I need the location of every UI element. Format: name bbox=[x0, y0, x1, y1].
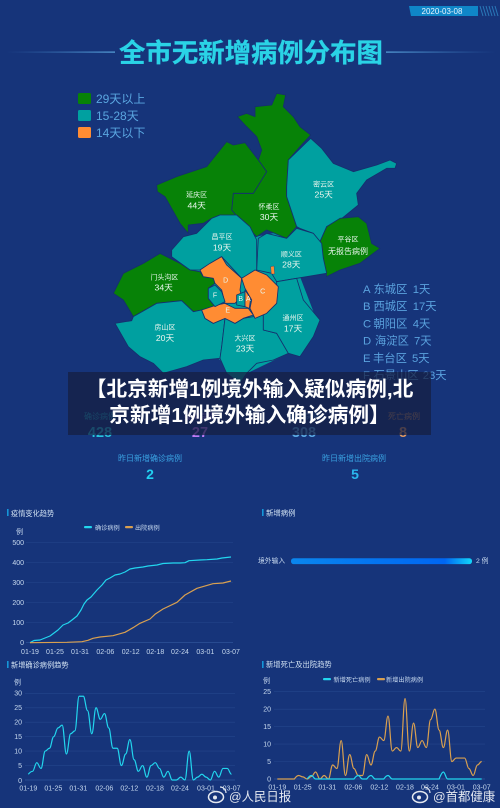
district: Changping bbox=[172, 215, 257, 278]
watermark: People's Daily bbox=[208, 787, 291, 804]
x axis labels: 02-24 bbox=[171, 649, 189, 656]
line: confirmed bbox=[30, 557, 231, 643]
x axis labels: 01-31 bbox=[71, 649, 89, 656]
district: Chaoyang bbox=[242, 270, 278, 318]
heading: new confirmed trend: 新增确诊病例趋势 bbox=[11, 660, 69, 670]
x axis labels: 03-01 bbox=[447, 784, 465, 792]
line: new deaths bbox=[307, 772, 482, 779]
x axis labels: 02-24 bbox=[171, 786, 189, 792]
chart legend: 新增死亡病例 bbox=[334, 676, 371, 684]
y axis labels: 0 bbox=[20, 640, 24, 647]
district letter key: 东城区 bbox=[374, 283, 407, 296]
district letter key: 23天 bbox=[423, 370, 447, 382]
chart legend: 出院病例 bbox=[135, 524, 160, 532]
statistics row: 确诊病例 bbox=[84, 411, 116, 421]
map legend: 14天以下 bbox=[96, 126, 145, 140]
y axis labels: 25 bbox=[14, 705, 22, 712]
y axis labels: 10 bbox=[263, 742, 271, 748]
y axis labels: 5 bbox=[18, 763, 22, 770]
district: Yanqing bbox=[157, 142, 267, 233]
chart legend bbox=[84, 524, 160, 532]
statistics row bbox=[84, 411, 420, 482]
district labels: C bbox=[260, 288, 265, 295]
district letter key: 朝阳区 bbox=[374, 318, 407, 331]
district labels: 顺义区 bbox=[281, 250, 302, 258]
date tag bbox=[409, 6, 498, 16]
district labels: 28天 bbox=[282, 260, 301, 270]
heading: new deaths and discharges: 新增死亡及出院趋势 bbox=[266, 660, 332, 669]
map legend: 15-28天 bbox=[96, 109, 139, 123]
x axis labels: 02-18 bbox=[146, 649, 164, 656]
district: airport exclave bbox=[271, 266, 275, 274]
district letter key: F bbox=[363, 370, 370, 382]
x axis labels: 01-19 bbox=[21, 649, 39, 656]
district: Shunyi bbox=[257, 228, 327, 282]
district: Tongzhou bbox=[263, 278, 320, 357]
district: Xicheng bbox=[237, 292, 245, 307]
district: Fangshan bbox=[115, 301, 225, 373]
y axis labels: 30 bbox=[14, 690, 22, 698]
district letter key: 5天 bbox=[412, 353, 430, 365]
panel: new confirmed trend chart bbox=[7, 660, 241, 792]
line: new confirmed bbox=[28, 696, 231, 780]
x axis labels: 02-06 bbox=[344, 784, 362, 792]
y axis labels: 25 bbox=[263, 689, 271, 696]
y axis labels: 0 bbox=[267, 776, 271, 784]
district labels: 通州区 bbox=[283, 313, 303, 322]
district labels: 大兴区 bbox=[235, 333, 255, 342]
y axis labels: 0 bbox=[18, 778, 22, 785]
district letter key: D bbox=[363, 336, 371, 348]
district letter key bbox=[363, 283, 447, 382]
headline overlay banner: 【北京新增1例境外输入疑似病例,北 bbox=[86, 378, 413, 400]
x axis labels: 03-07 bbox=[223, 786, 241, 792]
heading: new cases: 新增病例 bbox=[266, 508, 296, 518]
statistics row: 昨日新增确诊病例 bbox=[118, 453, 182, 463]
statistics row: 疑似病例 bbox=[184, 411, 216, 421]
district labels: 34天 bbox=[155, 283, 173, 293]
title: 全市无新增病例分布图 bbox=[119, 38, 383, 68]
district letter key: 石景山区 bbox=[374, 369, 419, 382]
x axis labels: 03-01 bbox=[197, 786, 215, 792]
district labels: 30天 bbox=[260, 212, 278, 222]
district labels: B bbox=[238, 296, 243, 303]
district letter key: 1天 bbox=[413, 284, 430, 296]
x axis labels: 02-12 bbox=[370, 784, 388, 792]
district letter key: B bbox=[363, 301, 371, 313]
y axis labels: 例 bbox=[16, 527, 23, 536]
district labels: 20天 bbox=[156, 333, 174, 343]
district letter key: 4天 bbox=[413, 319, 430, 331]
district labels: 怀柔区 bbox=[259, 202, 279, 211]
value: 2 cases: 2 例 bbox=[476, 556, 489, 565]
district: Shijingshan bbox=[208, 285, 225, 307]
x axis labels: 03-07 bbox=[222, 649, 240, 656]
district labels: 密云区 bbox=[313, 179, 334, 188]
district letter key: C bbox=[363, 319, 371, 331]
headline overlay banner bbox=[68, 372, 431, 435]
headline overlay banner: 京新增1例境外输入确诊病例】 bbox=[109, 404, 390, 427]
map legend bbox=[78, 92, 145, 140]
y axis labels: 5 bbox=[267, 759, 271, 766]
x axis labels: 01-31 bbox=[69, 786, 87, 792]
district letter key: 西城区 bbox=[374, 300, 407, 313]
district labels: 44天 bbox=[188, 200, 206, 210]
district letter key: 7天 bbox=[414, 336, 432, 348]
district letter key: 丰台区 bbox=[373, 351, 407, 365]
panel: epidemic trend chart bbox=[7, 509, 240, 656]
y axis labels: 20 bbox=[14, 720, 22, 726]
y axis labels: 200 bbox=[12, 600, 24, 607]
district labels: 门头沟区 bbox=[150, 272, 178, 281]
district: Daxing bbox=[220, 315, 288, 383]
district letter key: E bbox=[363, 353, 371, 365]
statistics row: 治愈病例 bbox=[288, 411, 320, 421]
line: discharged bbox=[30, 581, 231, 643]
district: Huairou bbox=[232, 93, 311, 238]
district: Miyun bbox=[287, 138, 397, 242]
bar: imported cases bbox=[291, 558, 472, 564]
x axis labels: 01-25 bbox=[294, 784, 312, 792]
statistics row: 2 bbox=[146, 466, 154, 482]
watermark: People's Daily: @人民日报 bbox=[229, 789, 291, 804]
x axis labels: 02-12 bbox=[120, 786, 138, 792]
statistics row: 8 bbox=[399, 425, 407, 441]
y axis labels: 500 bbox=[12, 540, 24, 547]
y axis labels bbox=[14, 678, 22, 785]
district letter key: A bbox=[363, 284, 371, 296]
date tag: 2020-03-08 bbox=[422, 7, 463, 16]
district: Dongcheng bbox=[245, 290, 251, 308]
district labels: 17天 bbox=[284, 323, 302, 333]
district: Fengtai bbox=[202, 303, 253, 323]
chart legend: 新增出院病例 bbox=[386, 676, 423, 684]
x axis labels: 01-25 bbox=[46, 649, 64, 656]
statistics row: 5 bbox=[351, 466, 359, 482]
statistics row: 死亡病例 bbox=[388, 411, 420, 421]
panel: new cases bar bbox=[258, 508, 489, 565]
y axis labels: 10 bbox=[14, 748, 22, 756]
x axis labels: 01-25 bbox=[44, 786, 62, 792]
x axis labels: 02-18 bbox=[146, 786, 164, 792]
x axis labels: 01-31 bbox=[318, 784, 336, 792]
y axis labels: 例 bbox=[14, 678, 21, 686]
x axis labels: 02-18 bbox=[396, 784, 414, 792]
y axis labels bbox=[12, 527, 24, 647]
statistics row: 27 bbox=[192, 425, 208, 441]
heading: epidemic trend: 疫情变化趋势 bbox=[11, 509, 54, 518]
y axis labels: 15 bbox=[263, 724, 271, 731]
y axis labels: 400 bbox=[12, 560, 24, 567]
district labels: A bbox=[246, 296, 251, 303]
x axis labels: 01-19 bbox=[19, 786, 37, 792]
y axis labels: 15 bbox=[14, 734, 22, 741]
x axis labels bbox=[21, 649, 240, 656]
district labels: D bbox=[223, 278, 228, 285]
district: Mentougou bbox=[113, 253, 215, 317]
statistics row: 308 bbox=[292, 425, 316, 441]
y axis labels: 20 bbox=[263, 706, 271, 714]
x axis labels: 02-24 bbox=[421, 784, 439, 792]
statistics row: 昨日新增出院病例 bbox=[322, 453, 386, 463]
district labels: 25天 bbox=[315, 190, 333, 200]
x axis labels: 02-06 bbox=[96, 649, 114, 656]
watermark: Capital Health bbox=[412, 787, 495, 804]
map of Beijing districts bbox=[113, 93, 397, 383]
district labels: 23天 bbox=[236, 344, 254, 354]
chart legend: 确诊病例 bbox=[95, 524, 120, 532]
district labels: 房山区 bbox=[155, 323, 175, 332]
district letter key: 海淀区 bbox=[375, 334, 409, 348]
x axis labels: 02-12 bbox=[122, 649, 140, 656]
district labels: F bbox=[213, 293, 217, 300]
district labels: E bbox=[225, 308, 230, 315]
x axis labels: 03-07 bbox=[473, 784, 491, 792]
district letter key: 17天 bbox=[413, 301, 437, 313]
map legend: 29天以上 bbox=[96, 92, 145, 106]
y axis labels: 300 bbox=[12, 580, 24, 587]
district labels: 无报告病例 bbox=[328, 246, 368, 256]
district labels: 平谷区 bbox=[338, 234, 358, 243]
district labels: 延庆区 bbox=[186, 190, 207, 199]
district labels bbox=[150, 179, 368, 354]
x axis labels: 01-19 bbox=[268, 784, 286, 792]
district labels: 19天 bbox=[213, 242, 231, 252]
statistics row: 428 bbox=[88, 425, 112, 441]
x axis labels bbox=[19, 786, 241, 792]
district: Haidian bbox=[200, 257, 242, 303]
district: Pinggu bbox=[320, 217, 380, 277]
y axis labels bbox=[263, 676, 271, 784]
panel: new deaths and discharges chart bbox=[262, 660, 491, 792]
label: imported: 境外输入 bbox=[258, 556, 285, 565]
y axis labels: 100 bbox=[12, 620, 24, 627]
x axis labels bbox=[268, 784, 491, 792]
x axis labels: 02-06 bbox=[95, 786, 113, 792]
x axis labels: 03-01 bbox=[196, 649, 214, 656]
district labels: 昌平区 bbox=[212, 233, 232, 241]
line: new discharged bbox=[277, 699, 482, 779]
y axis labels: 例 bbox=[263, 676, 270, 685]
watermark: Capital Health: @首都健康 bbox=[433, 789, 495, 804]
chart legend bbox=[323, 676, 423, 684]
